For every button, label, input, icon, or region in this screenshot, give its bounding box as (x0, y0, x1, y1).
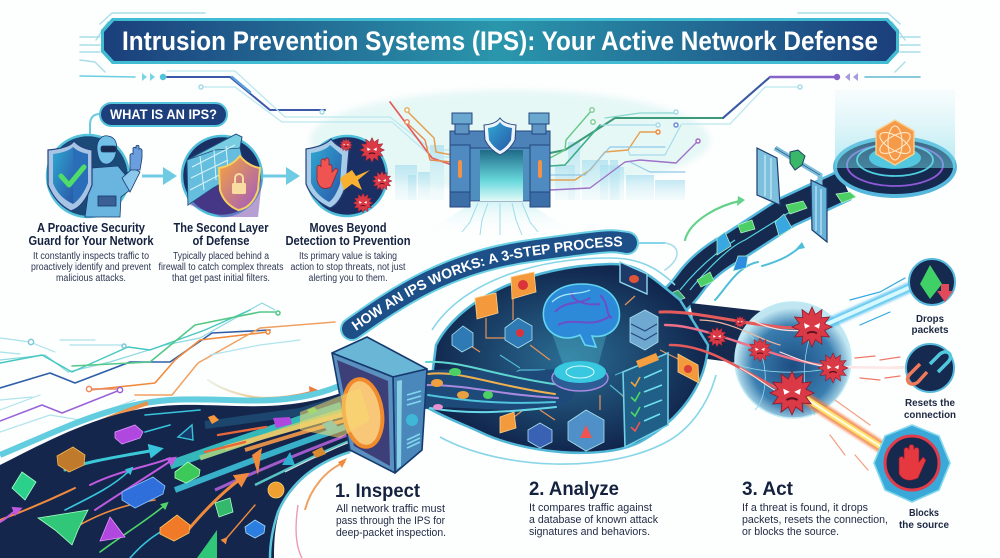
heading: Detection to Prevention (286, 234, 410, 248)
top face (332, 337, 427, 377)
label: blocks the source: the source (899, 519, 949, 531)
description: firewall to catch complex threats (158, 262, 284, 273)
description (158, 251, 284, 284)
lower curved arrow (305, 462, 345, 510)
viruses (707, 307, 848, 415)
glowing ring (339, 377, 387, 449)
heading pill ribbon: HOW AN IPS WORKS: A 3-STEP PROCESS (351, 236, 622, 330)
top circuit lines (80, 13, 920, 190)
icon: shield and robot guard (47, 135, 142, 217)
cubes (452, 318, 604, 451)
description: alerting you to them. (308, 273, 388, 284)
description: proactively identify and prevent (31, 262, 151, 273)
analyze network blob (424, 258, 716, 464)
description: that get past initial filters. (172, 273, 270, 284)
folders (475, 272, 699, 433)
action beams (802, 278, 915, 470)
checklist (623, 353, 668, 447)
step 1: inspect: pass through the IPS for (336, 515, 445, 527)
label: resets the connection (904, 397, 956, 421)
step 1: inspect: deep-packet inspection. (336, 527, 446, 539)
beam: drops packets (818, 278, 915, 328)
rainbow bands (170, 392, 368, 490)
heading: The Second Layer (174, 221, 269, 235)
section label: what is an IPS: WHAT IS AN IPS? (110, 106, 217, 122)
packets (12, 407, 354, 558)
step 1: inspect (335, 481, 446, 539)
secure road and hub (650, 90, 957, 318)
side face (393, 369, 427, 473)
step 3: act (742, 479, 888, 538)
traffic funnel (0, 380, 385, 558)
label: resets the connection: Resets the (905, 397, 955, 409)
icon: broken link (906, 344, 954, 392)
description (290, 251, 406, 284)
step 3: act: 3. Act (742, 479, 794, 500)
step 2: analyze: It compares traffic against (529, 502, 652, 514)
description: Typically placed behind a (173, 251, 269, 262)
description: Its primary value is taking (299, 251, 397, 262)
threat band (690, 303, 790, 370)
arrow (263, 167, 300, 185)
heading (28, 221, 154, 248)
flow arrows (0, 410, 266, 558)
label: blocks the source: Blocks (909, 507, 939, 519)
description: It constantly inspects traffic to (33, 251, 149, 262)
holographic platform (552, 361, 608, 391)
heading (286, 221, 410, 248)
title banner (101, 18, 899, 64)
IPS inspection box (300, 337, 427, 473)
server rack (630, 310, 658, 350)
hub (833, 136, 957, 198)
blob shape (428, 264, 708, 453)
label: blocks the source (899, 507, 949, 531)
step 3: act: If a threat is found, it drops (742, 502, 868, 514)
step 2: analyze: signatures and behaviors. (529, 526, 650, 538)
heading: Guard for Your Network (28, 234, 154, 248)
network links (462, 296, 680, 420)
panel: proactive security guard (28, 135, 154, 284)
heading: of Defense (192, 234, 250, 248)
funnel body (0, 386, 385, 558)
step 2: analyze: 2. Analyze (529, 479, 619, 500)
heading (174, 221, 269, 248)
icon: fortress gateway (425, 113, 575, 235)
label: drops packets (912, 313, 949, 336)
icon: hex core (876, 120, 914, 165)
description (31, 251, 151, 284)
stream band (424, 362, 560, 412)
security gate with doors (757, 148, 827, 242)
label: drops packets: Drops (916, 313, 944, 325)
icon: stop hand (874, 425, 950, 502)
icon: brain (543, 284, 619, 373)
panel: second layer of defense (158, 134, 284, 284)
outer arcs (432, 258, 716, 464)
icon: firewall with padlock shield (182, 134, 262, 217)
section label: what is an IPS (90, 103, 227, 135)
skyline (395, 142, 685, 200)
funnel edge glow (0, 380, 352, 455)
heading: Moves Beyond (310, 221, 386, 235)
label: resets the connection: connection (904, 409, 956, 421)
icon arrow to road (640, 196, 805, 300)
step 1: inspect: All network traffic must (336, 503, 445, 515)
title text: Intrusion Prevention Systems (IPS): Your Active Network Defense (122, 26, 878, 56)
description: action to stop threats, not just (290, 262, 406, 273)
threat stream lines (660, 312, 835, 395)
label: drops packets: packets (912, 324, 949, 336)
step 3: act: or blocks the source. (742, 526, 839, 538)
heading: A Proactive Security (37, 221, 145, 235)
beam: block source (802, 396, 883, 470)
arrow (142, 167, 177, 185)
road (650, 185, 845, 318)
front face (332, 353, 395, 473)
threat globe (735, 302, 851, 418)
light column (835, 90, 955, 168)
description: malicious attacks. (56, 273, 126, 284)
step 2: analyze (529, 479, 658, 538)
road packets (667, 192, 856, 303)
step 2: analyze: a database of known attack (529, 514, 658, 526)
left circuit traces (0, 303, 335, 432)
step 1: inspect: 1. Inspect (335, 481, 421, 502)
beam: reset connection (838, 356, 907, 380)
monitor (620, 262, 647, 294)
icon: drops packets (909, 259, 955, 305)
panel: moves beyond detection (286, 136, 410, 284)
icon: shield blocking viruses (306, 136, 392, 216)
step 3: act: packets, resets the connection, (742, 514, 888, 526)
